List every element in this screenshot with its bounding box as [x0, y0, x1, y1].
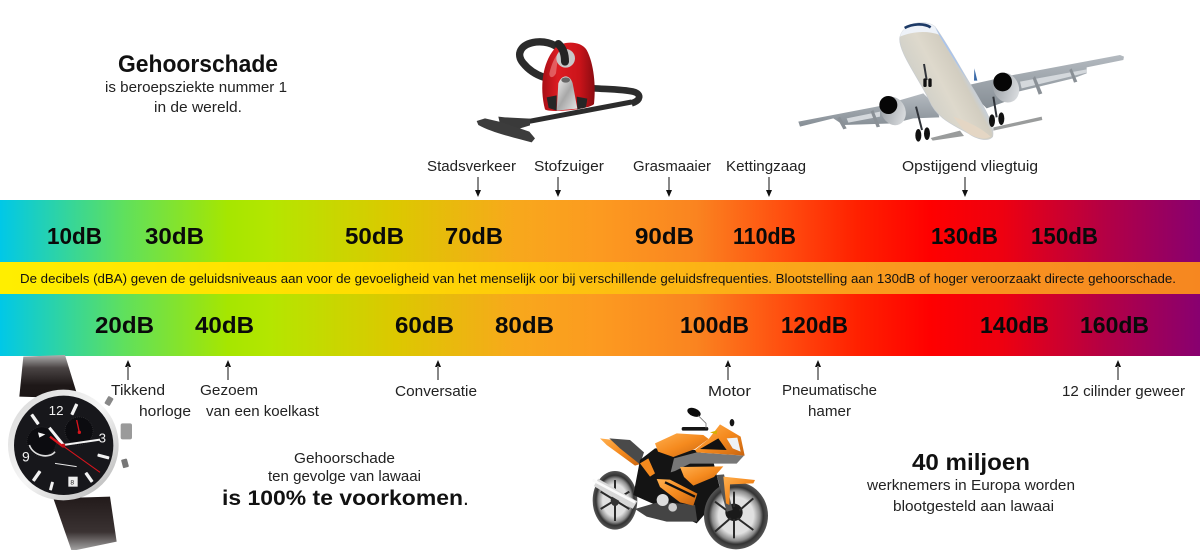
- bottom source labels: [111, 383, 1185, 420]
- icon: wristwatch: [8, 355, 132, 550]
- text block: 40 miljoen: 40 miljoen: [912, 449, 1030, 475]
- icon: vacuum cleaner: [477, 42, 639, 142]
- icon: wristwatch: 12: [49, 403, 63, 418]
- top arrows: [475, 177, 968, 197]
- bottom source labels: Conversatie: [395, 384, 477, 400]
- top source labels: Opstijgend vliegtuig: [902, 159, 1038, 175]
- top row decibel values: [47, 223, 1098, 249]
- icon: wristwatch: 8: [70, 479, 74, 486]
- top row decibel values: 70dB: [445, 223, 503, 249]
- heading: gehoorschade: [105, 51, 287, 116]
- text block: te voorkomen: [222, 451, 469, 510]
- top source labels: Stadsverkeer: [427, 159, 516, 175]
- text block: te voorkomen: Gehoorschade: [294, 451, 395, 467]
- bottom row decibel values: 100dB: [680, 312, 749, 338]
- heading: gehoorschade: Gehoorschade: [118, 51, 278, 78]
- top row decibel values: 30dB: [145, 223, 204, 249]
- text block: te voorkomen: ten gevolge van lawaai: [268, 469, 421, 485]
- bottom row decibel values: 140dB: [980, 312, 1049, 338]
- top row decibel values: 110dB: [733, 223, 796, 249]
- top gradient bar: [0, 200, 1200, 262]
- top row decibel values: 90dB: [635, 223, 694, 249]
- bottom row decibel values: 120dB: [781, 312, 848, 338]
- top row decibel values: 130dB: [931, 223, 998, 249]
- bottom row decibel values: 80dB: [495, 312, 554, 338]
- top source labels: Kettingzaag: [726, 159, 806, 175]
- top source labels: [427, 159, 1038, 175]
- top row decibel values: 150dB: [1031, 223, 1098, 249]
- top source labels: Stofzuiger: [534, 159, 604, 175]
- text block: 40 miljoen: werknemers in Europa worden: [866, 478, 1075, 494]
- icon: airplane: [798, 23, 1124, 142]
- text block: te voorkomen: .: [463, 487, 469, 510]
- explanation band: [0, 262, 1200, 294]
- bottom row decibel values: 40dB: [195, 312, 254, 338]
- bottom source labels: van een koelkast: [206, 404, 319, 420]
- icon: wristwatch: 9: [22, 449, 30, 465]
- heading: gehoorschade: in de wereld.: [154, 100, 242, 116]
- bottom arrows: [125, 360, 1121, 380]
- text block: 40 miljoen: [866, 449, 1075, 515]
- bottom row decibel values: 160dB: [1080, 312, 1149, 338]
- bottom source labels: Motor: [708, 384, 751, 400]
- bottom row decibel values: 20dB: [95, 312, 154, 338]
- bottom source labels: 12 cilinder geweer: [1062, 384, 1185, 400]
- bottom row decibel values: 60dB: [395, 312, 454, 338]
- bottom source labels: horloge: [139, 404, 191, 420]
- bottom source labels: Tikkend: [111, 383, 165, 399]
- heading: gehoorschade: is beroepsziekte nummer 1: [105, 80, 287, 96]
- bottom source labels: Gezoem: [200, 383, 258, 399]
- icon: wristwatch: 3: [99, 430, 106, 445]
- top row decibel values: 50dB: [345, 223, 404, 249]
- top source labels: Grasmaaier: [633, 159, 711, 175]
- bottom source labels: Pneumatische: [782, 383, 877, 399]
- text block: 40 miljoen: blootgesteld aan lawaai: [893, 499, 1054, 515]
- bottom source labels: hamer: [808, 404, 851, 420]
- top row decibel values: 10dB: [47, 223, 102, 249]
- bottom row decibel values: [95, 312, 1149, 338]
- icon: motorcycle: [593, 406, 768, 549]
- text block: te voorkomen: is 100% te voorkomen: [222, 487, 463, 510]
- explanation band: De decibels (dBA) geven de geluidsniveaus aan voor de gevoeligheid van het menselijk oor bij verschillende geluidsfrequenties. Blootstelling aan 130dB of hoger veroorzaakt directe gehoorschade.: [20, 271, 1176, 286]
- bottom gradient bar: [0, 294, 1200, 356]
